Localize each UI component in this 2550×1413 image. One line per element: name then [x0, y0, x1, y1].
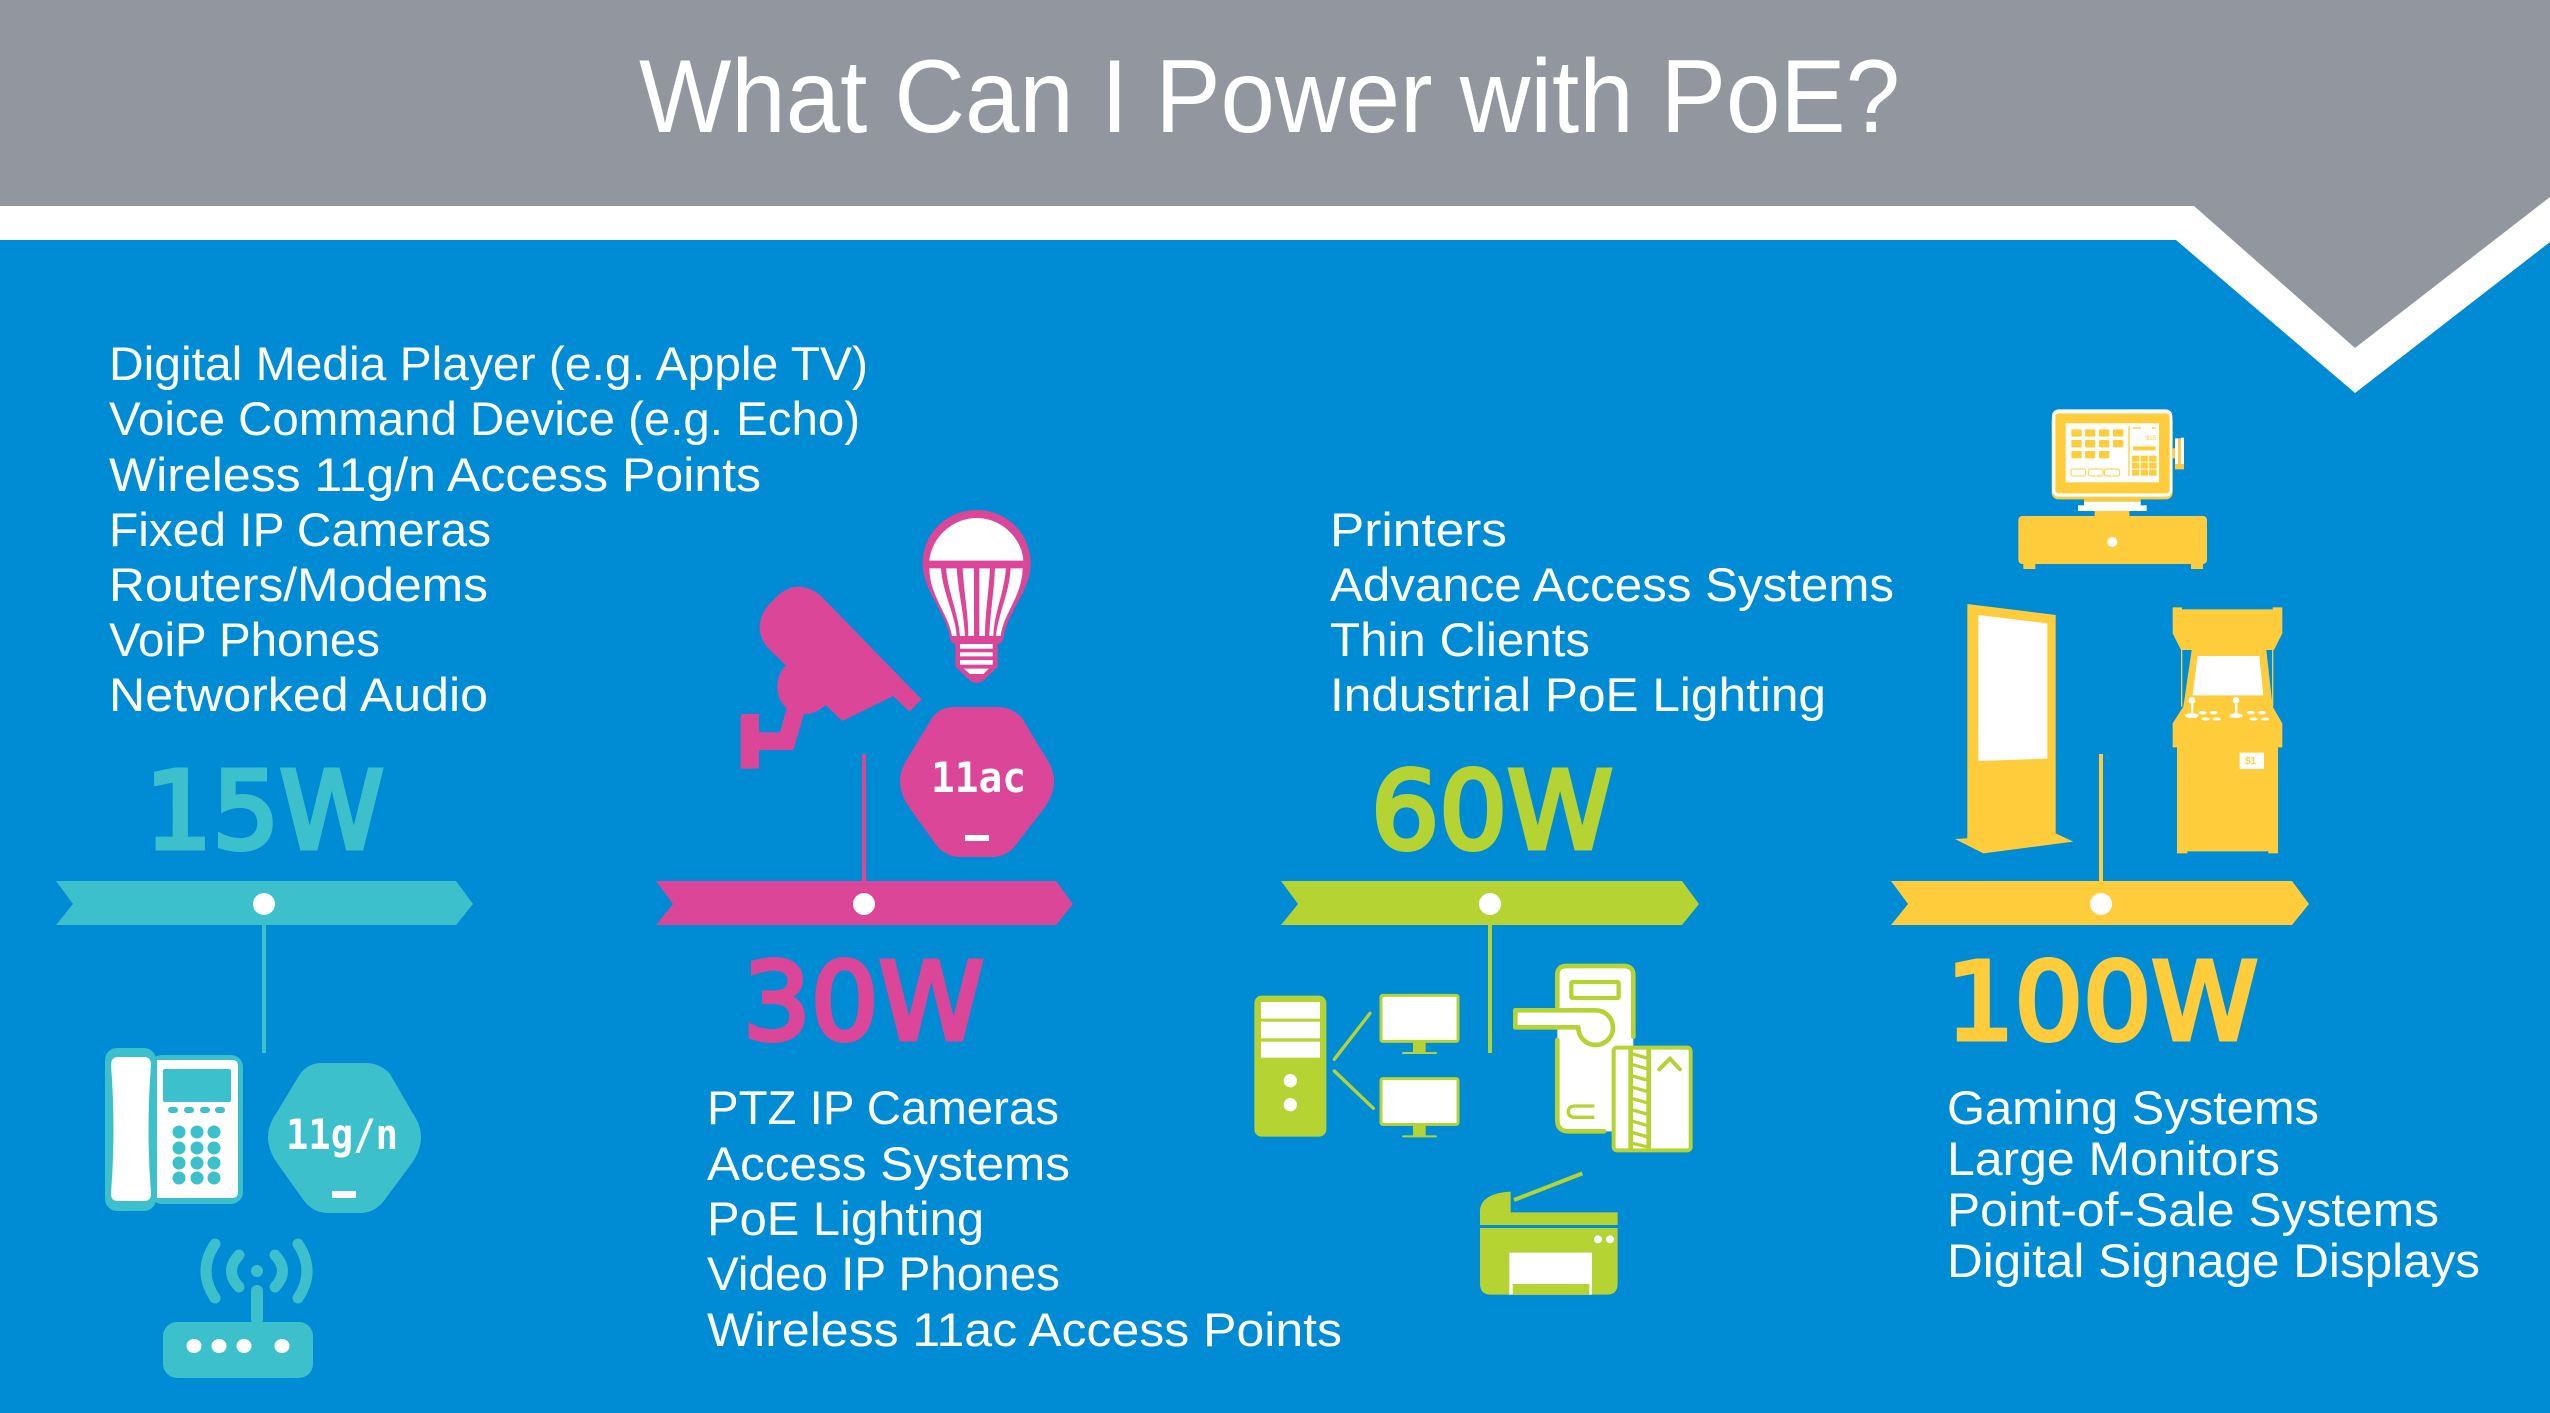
- text block: 15W devices: Digital Media Player (e.g. Apple TV): [109, 338, 868, 391]
- icon: point-of-sale terminal: $15: [2145, 435, 2157, 442]
- text block: 100W devices: Point-of-Sale Systems: [1947, 1184, 2439, 1237]
- text block: 30W devices: PTZ IP Cameras: [707, 1082, 1059, 1135]
- icon: thin client computer and monitors: [1254, 995, 1458, 1137]
- text block: 60W devices: Printers: [1330, 504, 1507, 557]
- text block: 100W devices: Large Monitors: [1947, 1133, 2280, 1186]
- banner: 30W: [656, 754, 1073, 925]
- heading: 100W: 100W: [1946, 941, 2258, 1065]
- title: What Can I Power with PoE?: [639, 39, 1900, 155]
- heading: 30W: 30W: [743, 941, 984, 1065]
- icon: wifi router: [163, 1244, 313, 1378]
- heading: 60W: 60W: [1371, 750, 1613, 874]
- text block: 15W devices: Wireless 11g/n Access Points: [109, 449, 761, 502]
- icon: point-of-sale terminal: [2018, 409, 2207, 569]
- icon: desk phone: [105, 1048, 243, 1211]
- text block: 100W devices: Digital Signage Displays: [1947, 1235, 2480, 1288]
- icon: 11g/n access point: 11g/n: [286, 1110, 398, 1159]
- icon: 11ac access point: [900, 707, 1054, 857]
- icon: 11ac access point: 11ac: [931, 753, 1026, 802]
- text block: 15W devices: VoiP Phones: [109, 614, 380, 667]
- text block: 30W devices: Wireless 11ac Access Points: [707, 1304, 1342, 1357]
- icon: LED light bulb: [923, 510, 1031, 683]
- banner: 15W: [56, 881, 473, 1053]
- text block: 100W devices: Gaming Systems: [1947, 1082, 2319, 1135]
- text block: 60W devices: Industrial PoE Lighting: [1330, 669, 1826, 722]
- text block: 15W devices: Networked Audio: [109, 669, 488, 722]
- text block: 100W devices: [1947, 1082, 2480, 1288]
- text block: 60W devices: [1330, 504, 1894, 722]
- text block: 15W devices: Routers/Modems: [109, 559, 488, 612]
- text block: 30W devices: Video IP Phones: [707, 1248, 1060, 1301]
- icon: arcade cabinet: [2173, 607, 2282, 853]
- icon: printer: [1480, 1173, 1618, 1295]
- icon: door access lock and key card: [1515, 966, 1691, 1150]
- banner: 60W: [1281, 881, 1699, 1053]
- text block: 30W devices: [707, 1082, 1342, 1357]
- icon: digital signage kiosk: [1955, 604, 2073, 853]
- text block: 60W devices: Thin Clients: [1330, 614, 1590, 667]
- panel: grey title banner with arrow: [0, 0, 2550, 348]
- icon: arcade cabinet: $1: [2245, 756, 2257, 767]
- text block: 15W devices: Fixed IP Cameras: [109, 504, 491, 557]
- heading: 15W: 15W: [145, 750, 384, 874]
- icon: 11g/n access point: [268, 1063, 421, 1213]
- icon: security camera: [741, 587, 922, 769]
- text block: 60W devices: Advance Access Systems: [1330, 559, 1894, 612]
- text block: 30W devices: PoE Lighting: [707, 1193, 984, 1246]
- text block: 30W devices: Access Systems: [707, 1138, 1070, 1191]
- banner: 100W: [1891, 754, 2309, 925]
- text block: 15W devices: Voice Command Device (e.g. Echo): [109, 393, 860, 446]
- text block: 15W devices: [109, 338, 868, 722]
